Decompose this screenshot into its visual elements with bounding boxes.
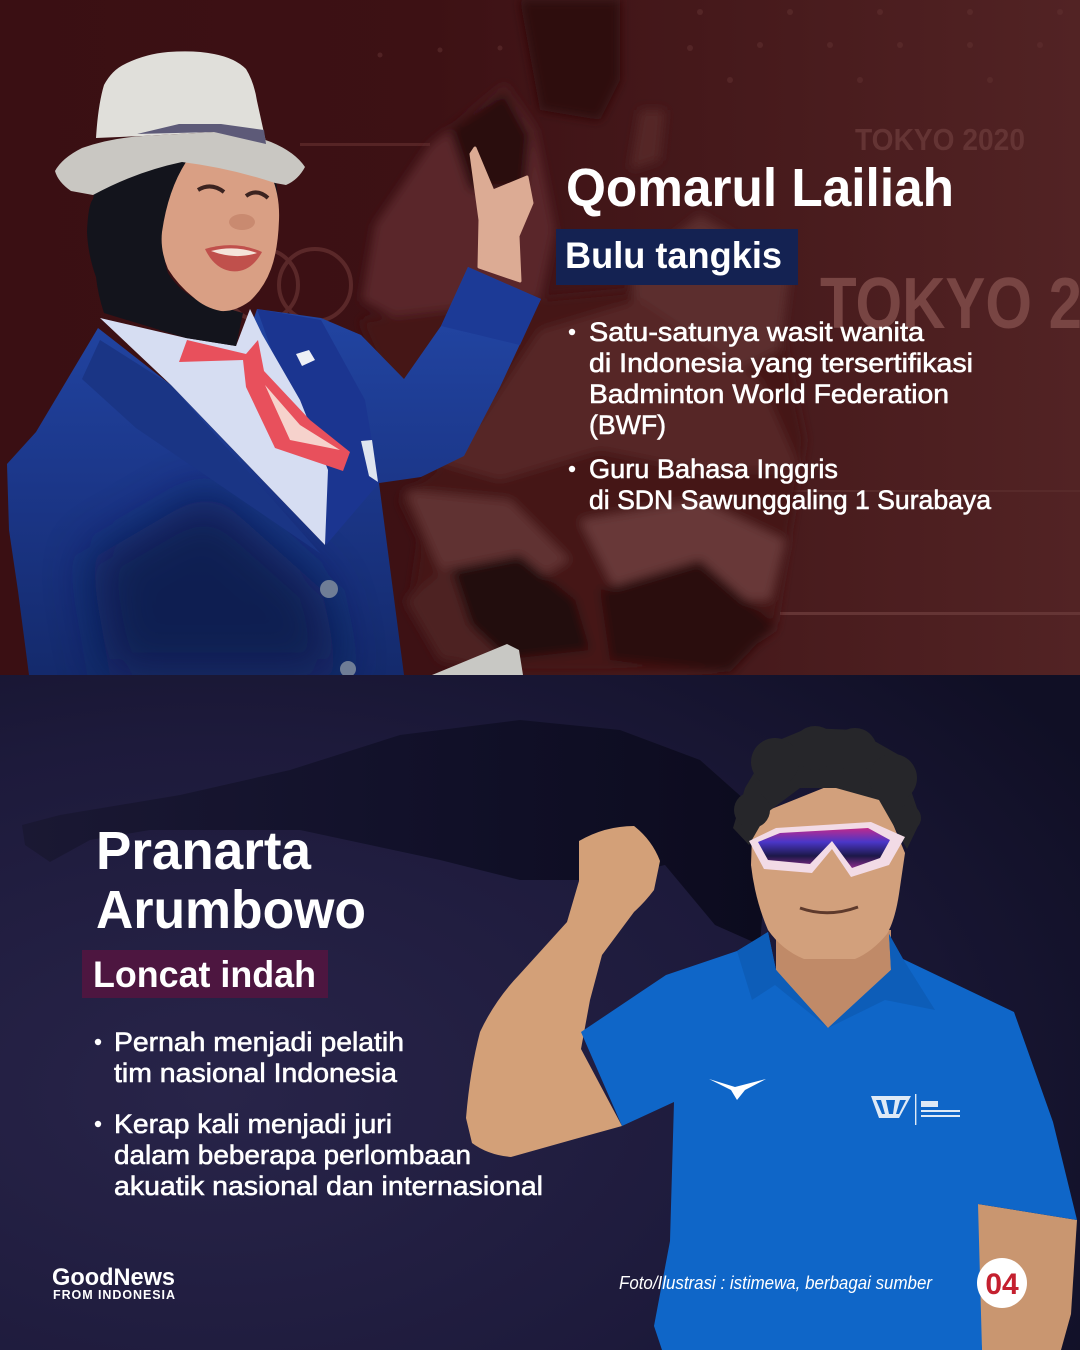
- logo: GoodNews from Indonesia: GoodNews: [52, 1264, 175, 1291]
- bullet list: Pranarta Arumbowo facts: tim nasional Indonesia: [114, 1058, 398, 1088]
- heading: Pranarta Arumbowo: Arumbowo: [96, 880, 366, 940]
- raised hand pointing: [471, 148, 532, 281]
- event logo on shirt: [871, 1094, 960, 1125]
- hair: [733, 726, 921, 849]
- right arm: [974, 1204, 1077, 1350]
- background: dark navy panel: [0, 675, 1080, 1350]
- person: referee with hat and blue blazer: [7, 51, 541, 677]
- label: Bulu tangkis: [556, 229, 798, 285]
- polo collar: [737, 932, 935, 1028]
- bullet list: Pranarta Arumbowo facts: akuatik nasional dan internasional: [114, 1171, 543, 1201]
- blazer: [7, 267, 541, 675]
- blue polo shirt: [581, 932, 1077, 1350]
- lapels: [82, 267, 541, 554]
- bullet list: Qomarul Lailiah facts: [569, 317, 992, 515]
- heading: Pranarta Arumbowo: Pranarta: [96, 821, 312, 881]
- brand logo on shirt: [709, 1079, 766, 1100]
- label: Loncat indah: Loncat indah: [93, 954, 316, 995]
- bullet list: Qomarul Lailiah facts: di Indonesia yang tersertifikasi: [589, 348, 973, 378]
- red scarf: [179, 340, 350, 471]
- bullet list: Qomarul Lailiah facts: Guru Bahasa Inggris: [589, 454, 838, 484]
- blazer pin, badge and buttons: [296, 350, 378, 677]
- page number badge: [977, 1258, 1027, 1308]
- eyes, nose and smile: [198, 186, 268, 271]
- background photo: badminton players and Tokyo 2020 signage: [226, 0, 1080, 672]
- panel: bottom section Pranarta Arumbowo: [0, 675, 1080, 1350]
- person: coach in blue polo with raised fist: [466, 726, 1077, 1350]
- shirt: [100, 309, 328, 545]
- bullet list: Qomarul Lailiah facts: Satu-satunya wasit wanita: [589, 317, 925, 347]
- sunglasses: [749, 822, 905, 877]
- bullet list: Qomarul Lailiah facts: Badminton World Federation: [589, 379, 949, 409]
- bullet list: Pranarta Arumbowo facts: dalam beberapa perlombaan: [114, 1140, 471, 1170]
- bullet list: Qomarul Lailiah facts: di SDN Sawunggaling 1 Surabaya: [589, 485, 992, 515]
- bullet list: Pranarta Arumbowo facts: Kerap kali menjadi juri: [114, 1109, 392, 1139]
- object at bottom: [432, 644, 523, 675]
- neck: [776, 930, 891, 1030]
- heading: Qomarul Lailiah: Qomarul Lailiah: [566, 158, 954, 218]
- background photo: badminton players and Tokyo 2020 signage: TOKYO 2020: [855, 122, 1025, 157]
- bullet list: Qomarul Lailiah facts: (BWF): [589, 410, 666, 440]
- panel: top section Qomarul Lailiah: [0, 0, 1080, 677]
- bullet list: Pranarta Arumbowo facts: Pernah menjadi pelatih: [114, 1027, 404, 1057]
- face: [751, 783, 905, 959]
- hat: [55, 51, 305, 195]
- raised arm and fist: [466, 826, 660, 1157]
- smile: [800, 907, 858, 913]
- page number badge: 04: [985, 1268, 1019, 1301]
- label: Bulu tangkis: Bulu tangkis: [565, 235, 782, 276]
- bullet list: Pranarta Arumbowo facts: [95, 1027, 543, 1201]
- background photo: diver silhouette: [22, 720, 765, 945]
- hijab: [87, 160, 279, 346]
- face: [162, 162, 279, 311]
- background: dark maroon panel: [0, 0, 1080, 675]
- blazer shading: [90, 490, 340, 675]
- heading: Pranarta Arumbowo: [96, 821, 366, 940]
- photo credit: Foto/Ilustrasi : istimewa, berbagai sumber: [619, 1273, 933, 1293]
- logo: GoodNews from Indonesia: FROM INDONESIA: [53, 1288, 175, 1302]
